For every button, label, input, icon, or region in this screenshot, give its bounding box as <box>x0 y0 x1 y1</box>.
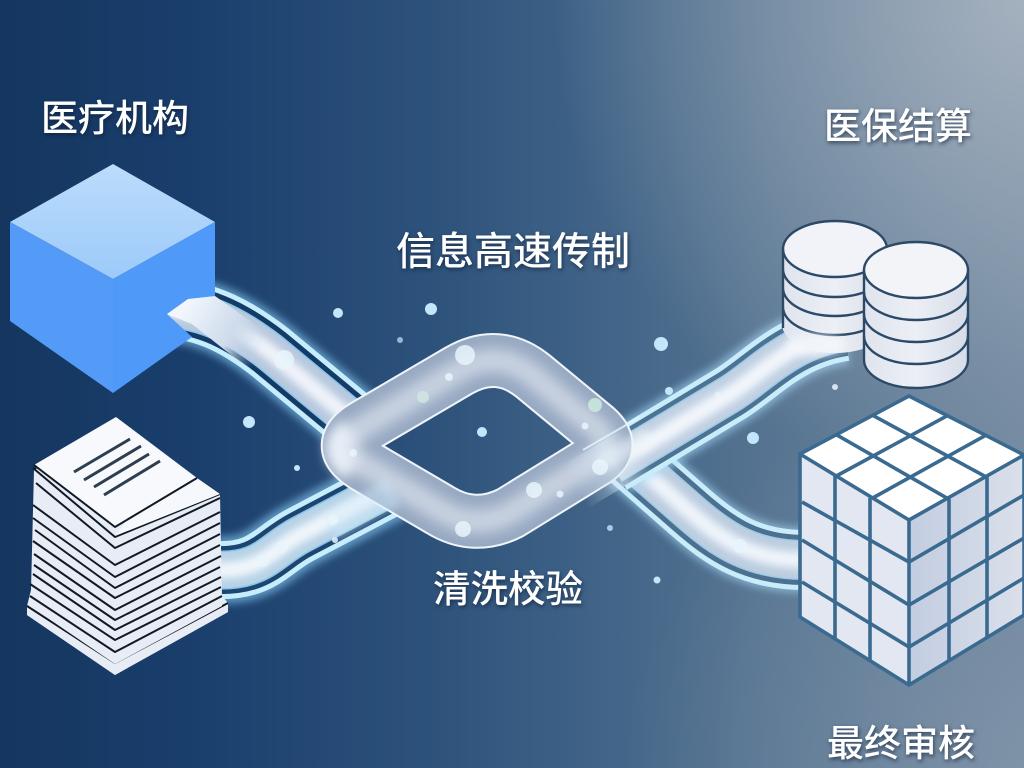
icon: stack of paper documents <box>27 417 228 675</box>
glass ring: cleaning and validation loop <box>338 360 606 521</box>
tube overlay crossing the ring <box>575 417 650 487</box>
heading: cleaning and validation: 清洗校验 <box>433 568 583 610</box>
icon: back database cylinder <box>783 221 887 356</box>
tube glow over lower-left of the ring <box>330 492 394 528</box>
heading: high-speed information copy: 信息高速传制 <box>396 231 630 274</box>
icon: blue medical institution cube <box>10 164 274 393</box>
icon: second sheet corner <box>115 478 220 536</box>
arrow: data tube from ring to medical settlement database <box>612 332 845 465</box>
icon: front database cylinder <box>864 242 968 388</box>
icon: grid cube for final review <box>800 396 1024 685</box>
data particles <box>243 303 838 584</box>
heading: medical institutions: 医疗机构 <box>41 98 189 139</box>
arrow: data tube from document stack into ring <box>215 485 395 570</box>
heading: medical insurance settlement: 医保结算 <box>824 106 972 147</box>
heading: final review: 最终审核 <box>827 723 975 764</box>
arrow: data tube from ring to final review cube <box>625 455 805 560</box>
icon: top sheet with text lines <box>34 417 197 527</box>
arrow: data tube from medical institution cube into ring <box>150 308 352 420</box>
